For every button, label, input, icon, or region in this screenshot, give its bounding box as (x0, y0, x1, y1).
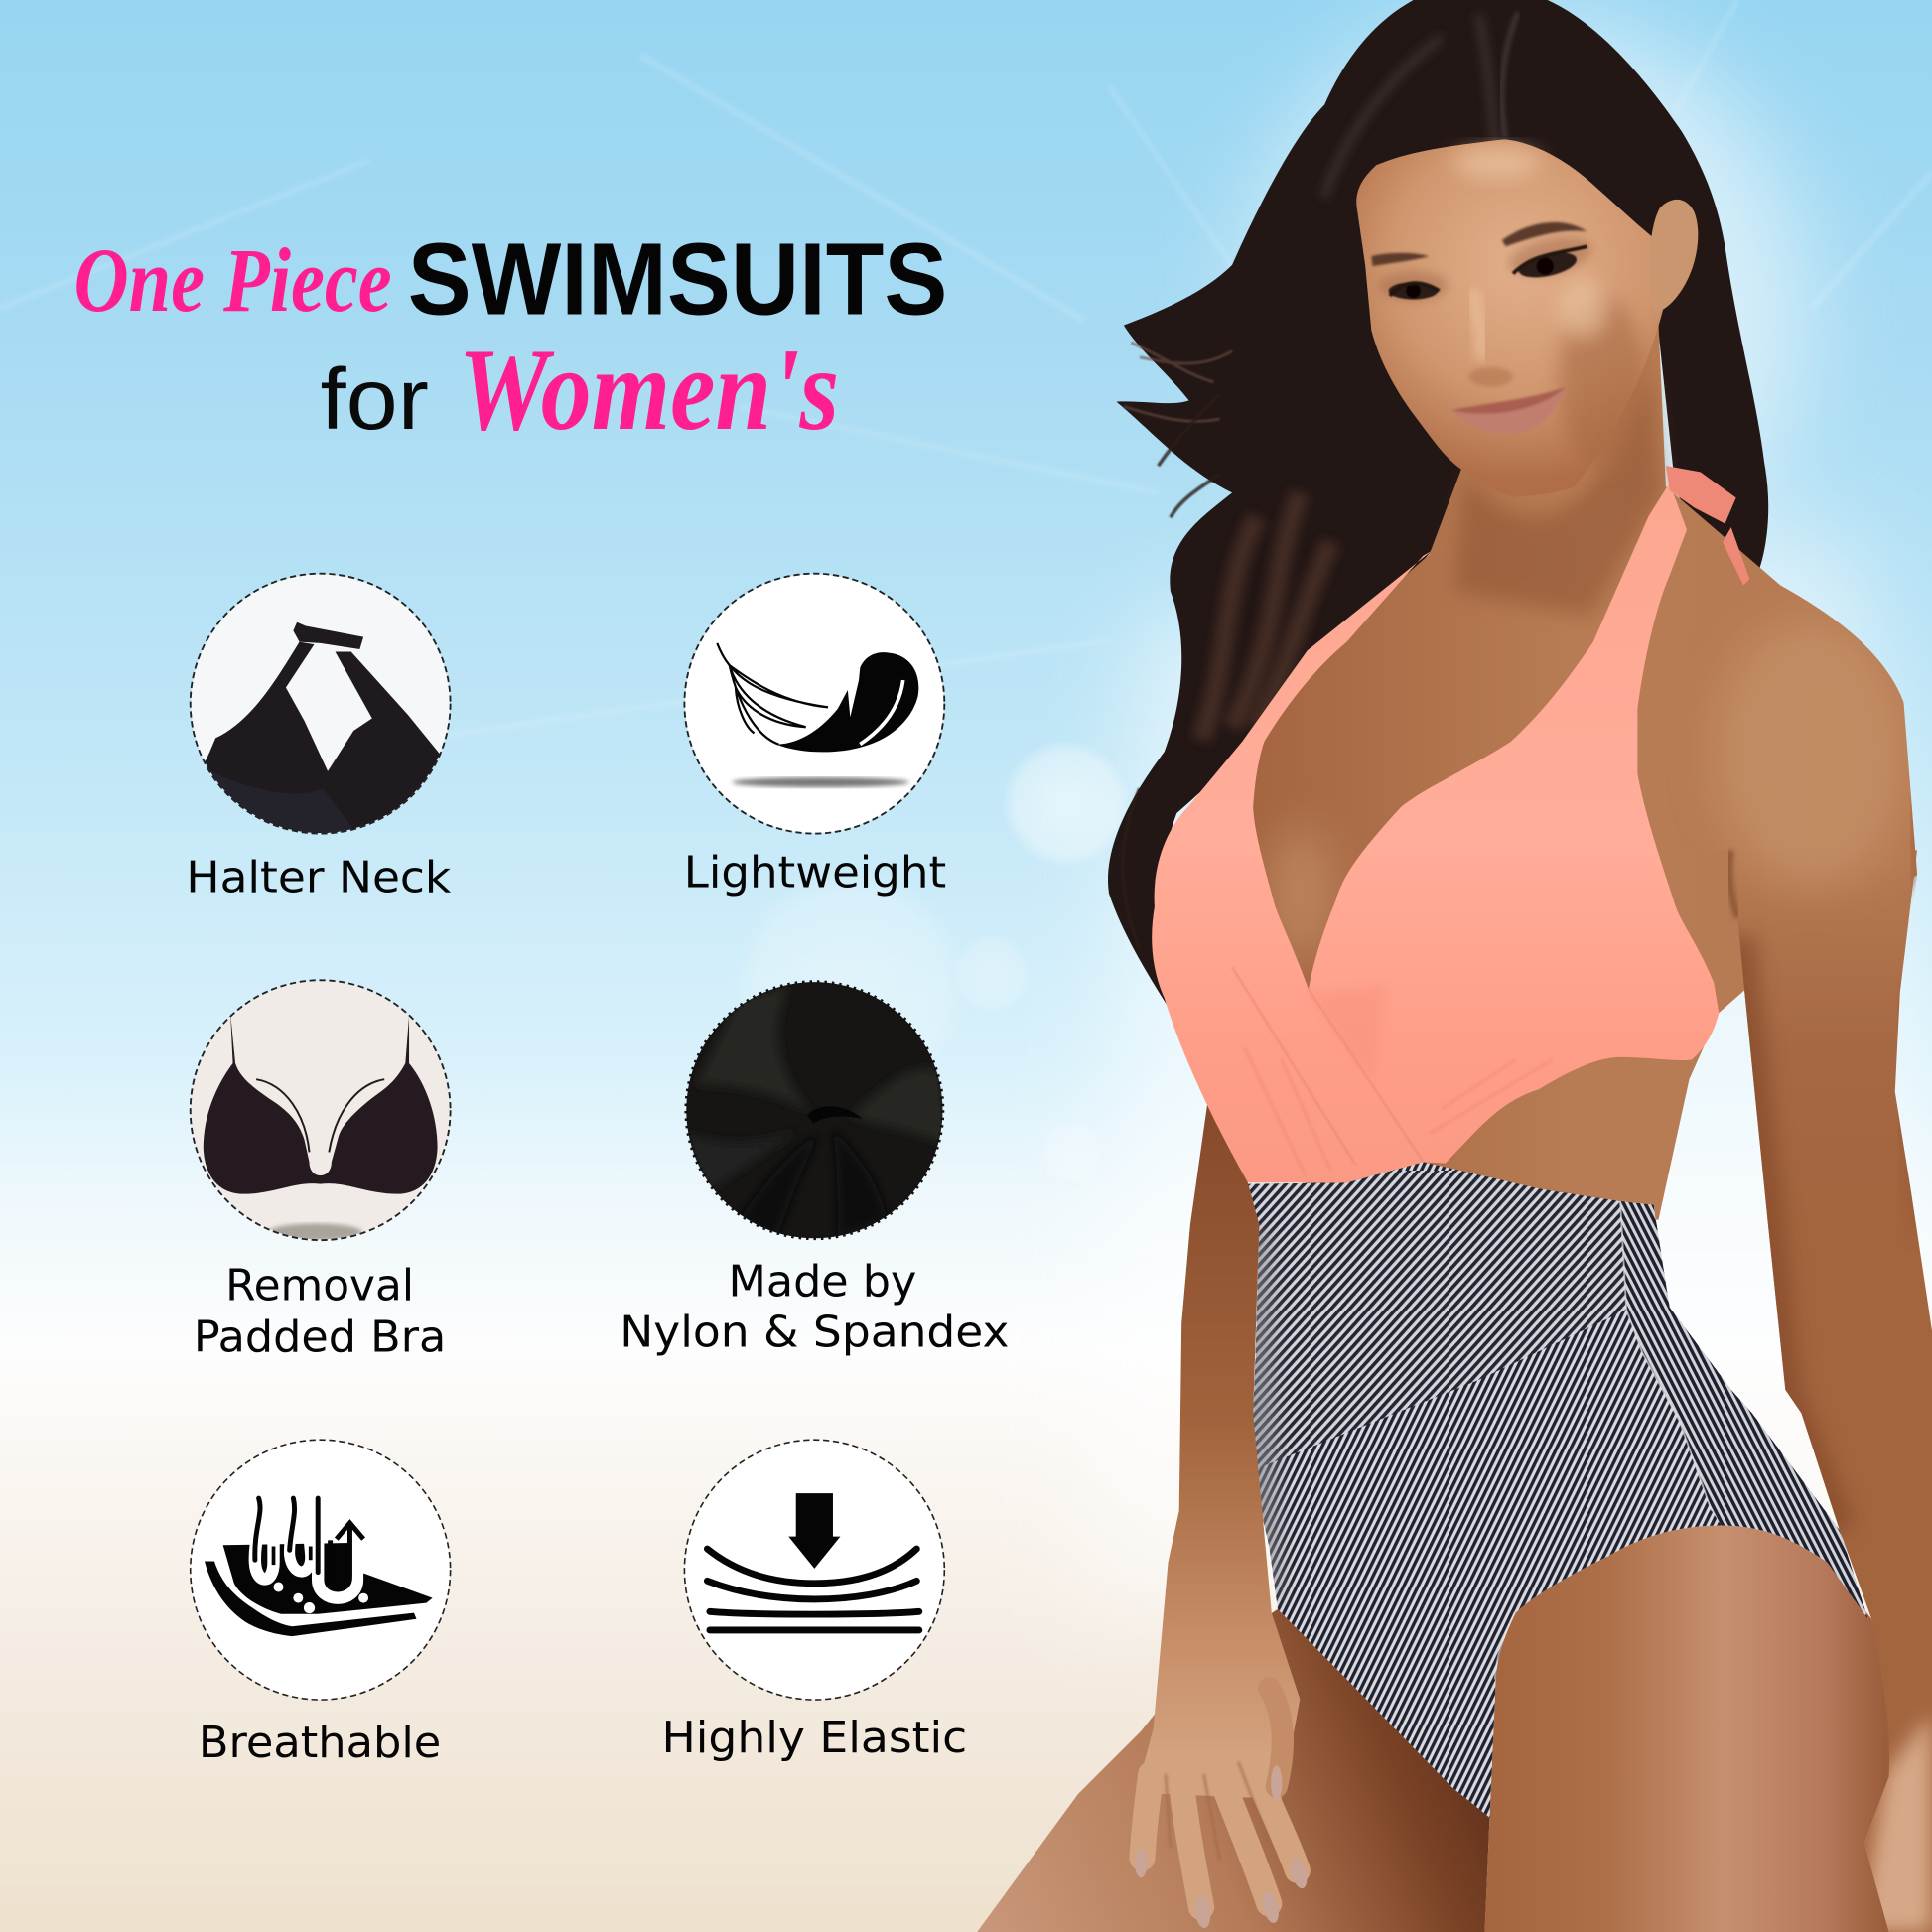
title (73, 221, 947, 455)
feature: nylon and spandex fabric (620, 982, 1009, 1357)
swimsuit: peach halter top (1152, 483, 1719, 1182)
left thigh (977, 1609, 1489, 1932)
background: white glow behind the model (1084, 12, 1932, 1601)
background: lens flares (733, 740, 1130, 1184)
face shading and highlights (1559, 296, 1645, 469)
swimsuit: halter tie (1666, 466, 1749, 586)
dashed circle outline (684, 574, 944, 834)
title: One Piece: One Piece (73, 229, 392, 331)
swimsuit: striped lower panel (1232, 1162, 1885, 1818)
feature: removal padded bra (191, 980, 451, 1362)
hair: long dark hair behind body (1108, 0, 1768, 1059)
icon: black fabric swatch (686, 982, 949, 1238)
label: Removal Padded Bra: Removal (225, 1261, 414, 1311)
icon: halter neck garment (191, 574, 450, 833)
hair part highlight (1502, 12, 1518, 138)
shoulder highlight (1713, 617, 1922, 888)
dashed circle outline (191, 1440, 451, 1700)
label: Made by Nylon & Spandex: Made by (728, 1258, 916, 1308)
title: Women's: Women's (459, 324, 839, 455)
head: face with hairline (1356, 12, 1698, 497)
label: Made by Nylon & Spandex: Nylon & Spandex (620, 1308, 1009, 1357)
dashed circle outline (191, 574, 451, 834)
icon: feather (685, 574, 944, 833)
label: Lightweight: Lightweight (684, 849, 946, 898)
right arm inner shading (1739, 936, 1922, 1530)
body: torso skin and neck (1232, 296, 1917, 1220)
label: Removal Padded Bra: Padded Bra (194, 1312, 446, 1362)
neck shadow (1453, 369, 1663, 617)
eyes (1389, 246, 1587, 300)
chest highlight (1268, 826, 1332, 961)
feature: lightweight (684, 574, 946, 898)
eyebrows (1371, 222, 1587, 266)
icon: elastic layers with arrow (685, 1441, 944, 1699)
feature: halter neck (185, 574, 456, 903)
title: for: for (321, 351, 429, 448)
ear (1650, 200, 1698, 313)
dashed circle outline (191, 980, 451, 1240)
right arm (1731, 850, 1932, 1932)
feature: breathable (191, 1440, 451, 1768)
armpit crease (1729, 850, 1737, 918)
fingers (1142, 1774, 1298, 1907)
label: Breathable: Breathable (199, 1719, 441, 1768)
right hand tone (1861, 1713, 1932, 1932)
label: Made by Nylon & Spandex (620, 1258, 1009, 1357)
feature: highly elastic (661, 1440, 967, 1763)
left arm and hand (1135, 1059, 1310, 1929)
label: Removal Padded Bra (194, 1261, 446, 1362)
background: sun rays (0, 0, 1932, 740)
label: Highly Elastic: Highly Elastic (661, 1714, 967, 1763)
title: SWIMSUITS: SWIMSUITS (408, 221, 947, 336)
icon: padded bra (191, 981, 450, 1241)
icon: breathable fabric (191, 1441, 450, 1699)
lips (1451, 387, 1566, 434)
dashed circle outline (684, 1440, 944, 1700)
model photo illustration (977, 0, 1932, 1932)
label: Halter Neck: Halter Neck (186, 854, 452, 903)
right thigh (1484, 1525, 1889, 1932)
